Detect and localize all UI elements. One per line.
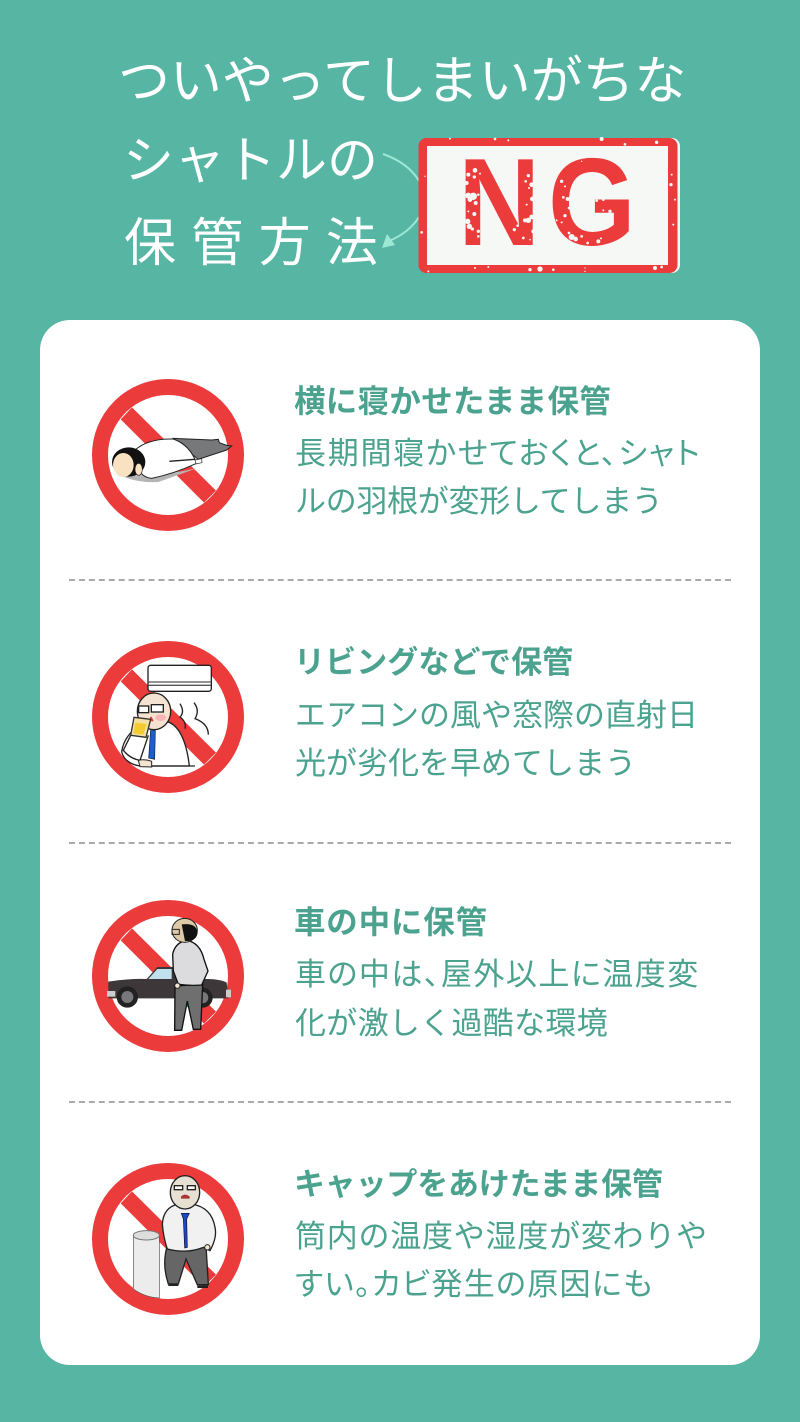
text: item 4 line 2: すい。カビ発生の原因にも (295, 1267, 654, 1302)
heading: item 3: 車の中に保管 (294, 904, 488, 940)
text: item 3 line 2: 化が激しく過酷な環境 (295, 1006, 608, 1041)
heading: item 4: キャップをあけたまま保管 (294, 1167, 663, 1202)
NG stamp: G (548, 134, 636, 272)
heading: item 1: 横に寝かせたまま保管 (294, 383, 611, 419)
panel: card (40, 320, 760, 1365)
text: item 2 line 1: エアコンの風や窓際の直射日 (295, 698, 698, 733)
icon: no car (92, 900, 244, 1052)
NG stamp: N (458, 134, 540, 272)
icon: no lying down (92, 379, 244, 531)
title line 1: ついやってしまいがちな (118, 53, 686, 111)
icon: no living room (92, 641, 244, 793)
title line 3: 保管方法 (124, 215, 393, 273)
text: item 1 line 2: ルの羽根が変形してしまう (295, 484, 662, 519)
text: item 1 line 1: 長期間寝かせておくと、シャト (295, 436, 701, 471)
title line 2: シャトルの (123, 132, 378, 189)
NG stamp (418, 134, 680, 273)
heading: item 2: リビングなどで保管 (294, 645, 573, 680)
icon: no open cap (92, 1163, 244, 1315)
arrow from title to stamp (382, 153, 418, 248)
text: item 4 line 1: 筒内の温度や湿度が変わりや (295, 1219, 708, 1254)
text: item 2 line 2: 光が劣化を早めてしまう (295, 746, 636, 781)
text: item 3 line 1: 車の中は、屋外以上に温度変 (295, 957, 700, 992)
